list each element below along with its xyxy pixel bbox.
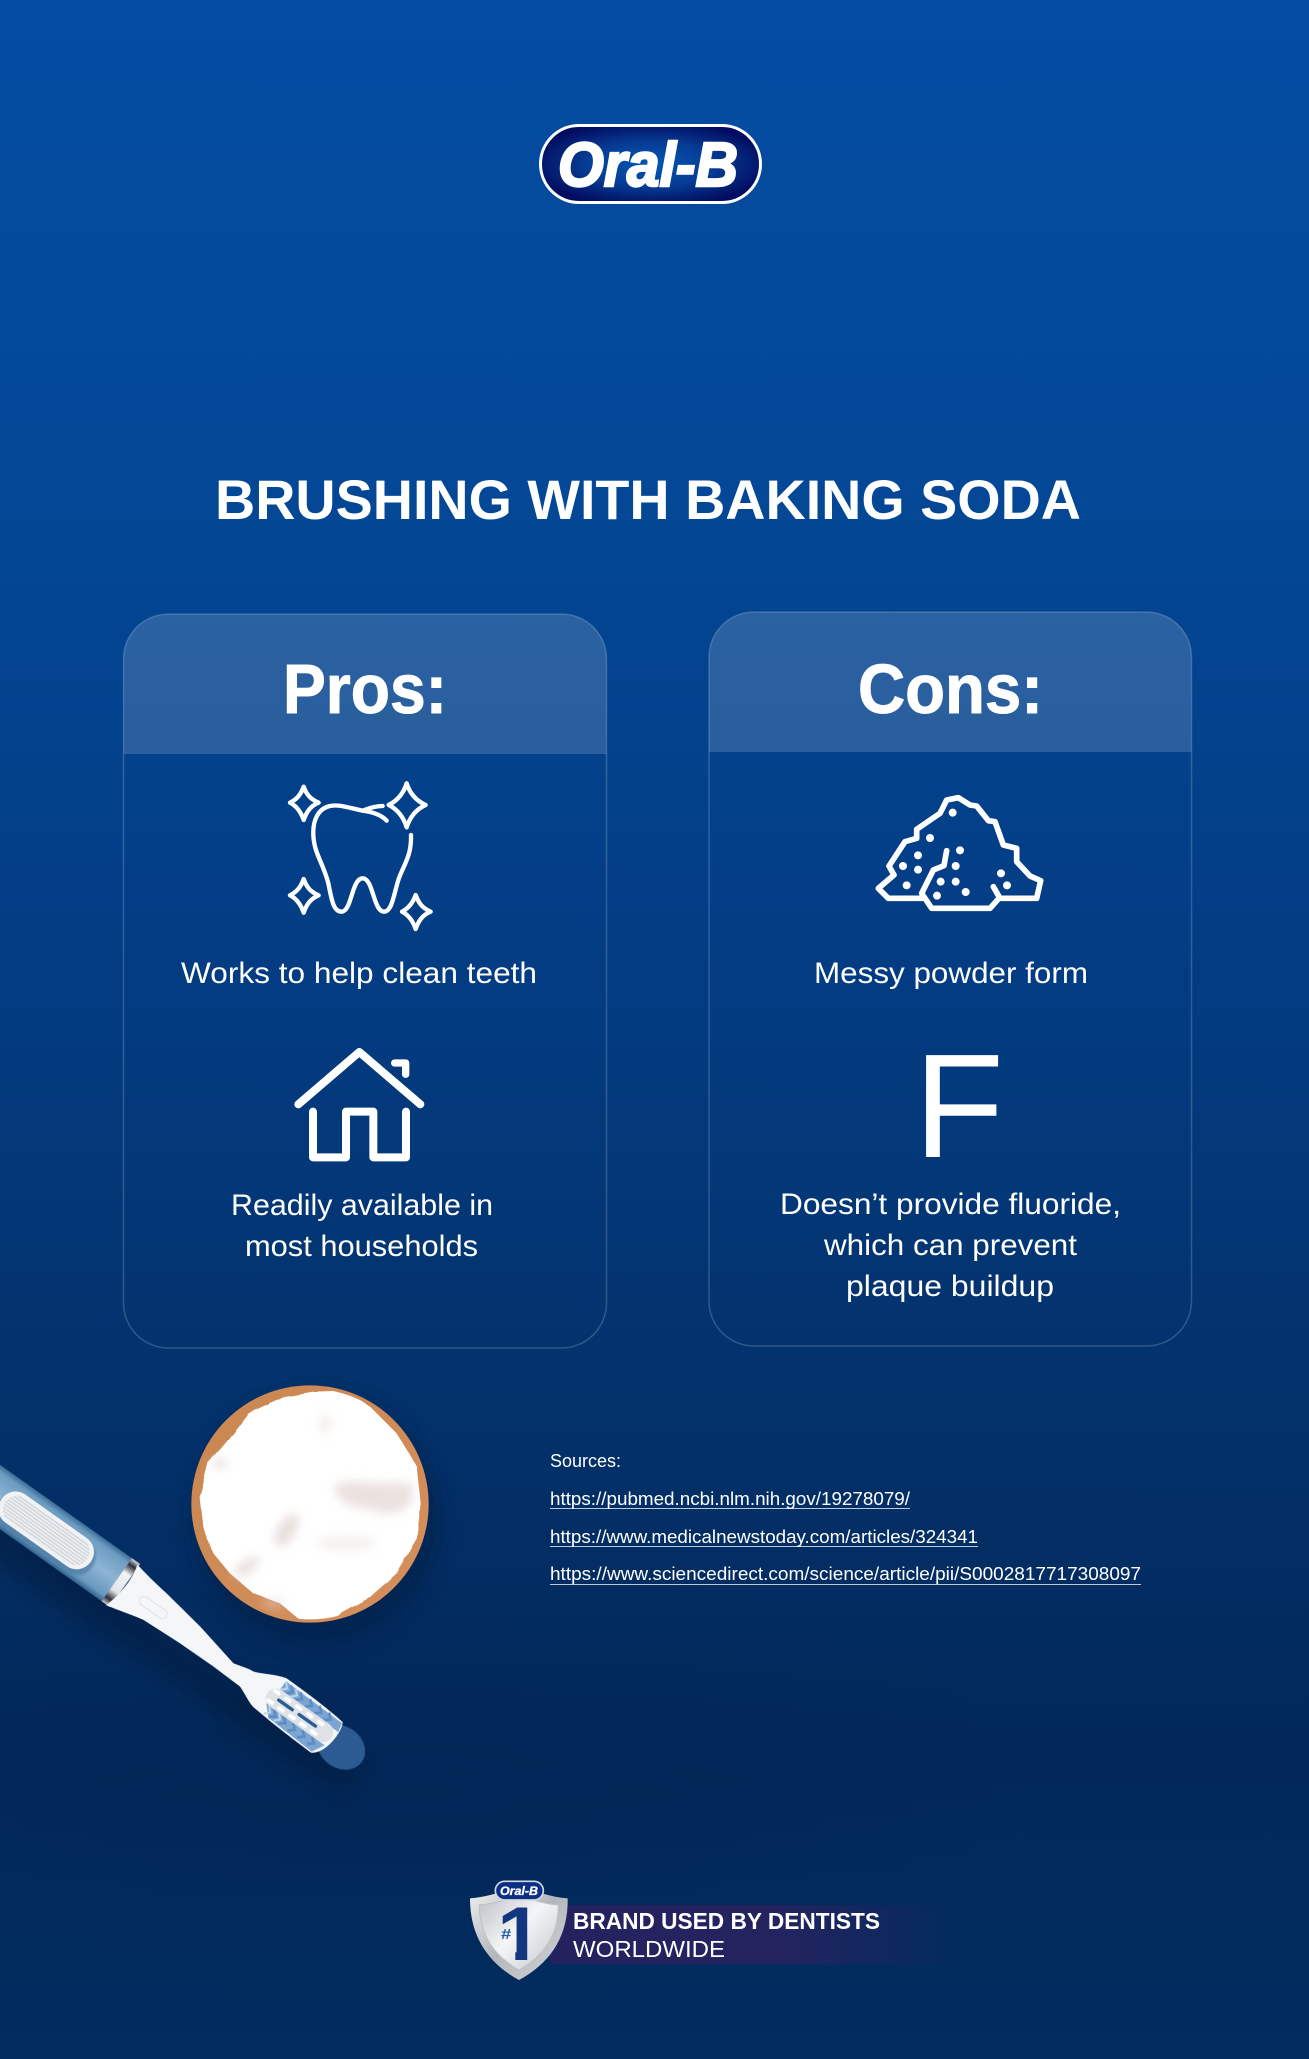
- toothbrush logo emboss: [138, 1595, 169, 1621]
- icon: powder pile: [878, 798, 1041, 908]
- cons text: fluoride: [780, 1188, 1121, 1303]
- badge shield: 1: [497, 1892, 544, 1977]
- cons text: fluoride: plaque buildup: [846, 1270, 1054, 1303]
- icon: house: [298, 1052, 420, 1157]
- pros text: households: [231, 1189, 493, 1263]
- icon: fluoride F: F: [914, 1024, 1004, 1189]
- toothbrush in axis-aligned coordinates: [0, 1460, 386, 1806]
- cons panel header: [709, 612, 1192, 752]
- cons text: fluoride: which can prevent: [823, 1229, 1078, 1262]
- pros panel frame: [124, 614, 606, 1348]
- pros text: households: Readily available in: [231, 1189, 493, 1222]
- badge band: [550, 1905, 960, 1964]
- cons text: fluoride: Doesn’t provide fluoride,: [780, 1188, 1121, 1221]
- badge: number one brand: WORLDWIDE: [573, 1936, 725, 1962]
- cons text: messy powder: Messy powder form: [814, 957, 1088, 990]
- toothbrush outer bristles: [259, 1679, 345, 1758]
- sources: https://www.sciencedirect.com/science/article/pii/S0002817717308097: [550, 1564, 1141, 1584]
- toothbrush handle: [0, 1460, 133, 1602]
- logo: Oral-B: Oral-B: [558, 131, 738, 200]
- toothbrush collar: [102, 1558, 140, 1607]
- badge shield: [470, 1881, 568, 1980]
- pros text: clean teeth: Works to help clean teeth: [181, 957, 537, 990]
- toothbrush bristle end tuft: [309, 1716, 374, 1779]
- cons heading: Cons:: [858, 650, 1043, 728]
- badge text: BRAND USED BY DENTISTS: [573, 1908, 880, 1934]
- toothbrush grip shadow: [0, 1487, 103, 1582]
- toothbrush neck and head: [105, 1563, 351, 1759]
- sources: https://www.medicalnewstoday.com/articles/324341: [550, 1527, 978, 1547]
- pros text: households: most households: [245, 1230, 478, 1263]
- image: toothbrush: [0, 1460, 386, 1806]
- panel: cons: [709, 612, 1192, 1346]
- image: bowl of baking soda: [191, 1385, 440, 1643]
- title: BRUSHING WITH BAKING SODA: [215, 468, 1081, 531]
- sources: https://pubmed.ncbi.nlm.nih.gov/19278079/: [550, 1489, 910, 1509]
- badge shield: Oral-B: [500, 1884, 538, 1898]
- badge: number one brand: [470, 1881, 960, 1980]
- toothbrush grip: [0, 1485, 101, 1576]
- toothbrush centre bristles: [262, 1685, 337, 1746]
- toothbrush shadow: [0, 1483, 373, 1806]
- pros heading: Pros:: [283, 650, 447, 728]
- badge shield: #: [501, 1927, 511, 1943]
- sources: [550, 1451, 1141, 1585]
- cons panel frame: [709, 612, 1192, 1346]
- sources: Sources:: [550, 1451, 621, 1471]
- icon: sparkling tooth: [290, 783, 431, 929]
- pros panel header: [124, 614, 606, 754]
- panel: pros: [124, 614, 606, 1348]
